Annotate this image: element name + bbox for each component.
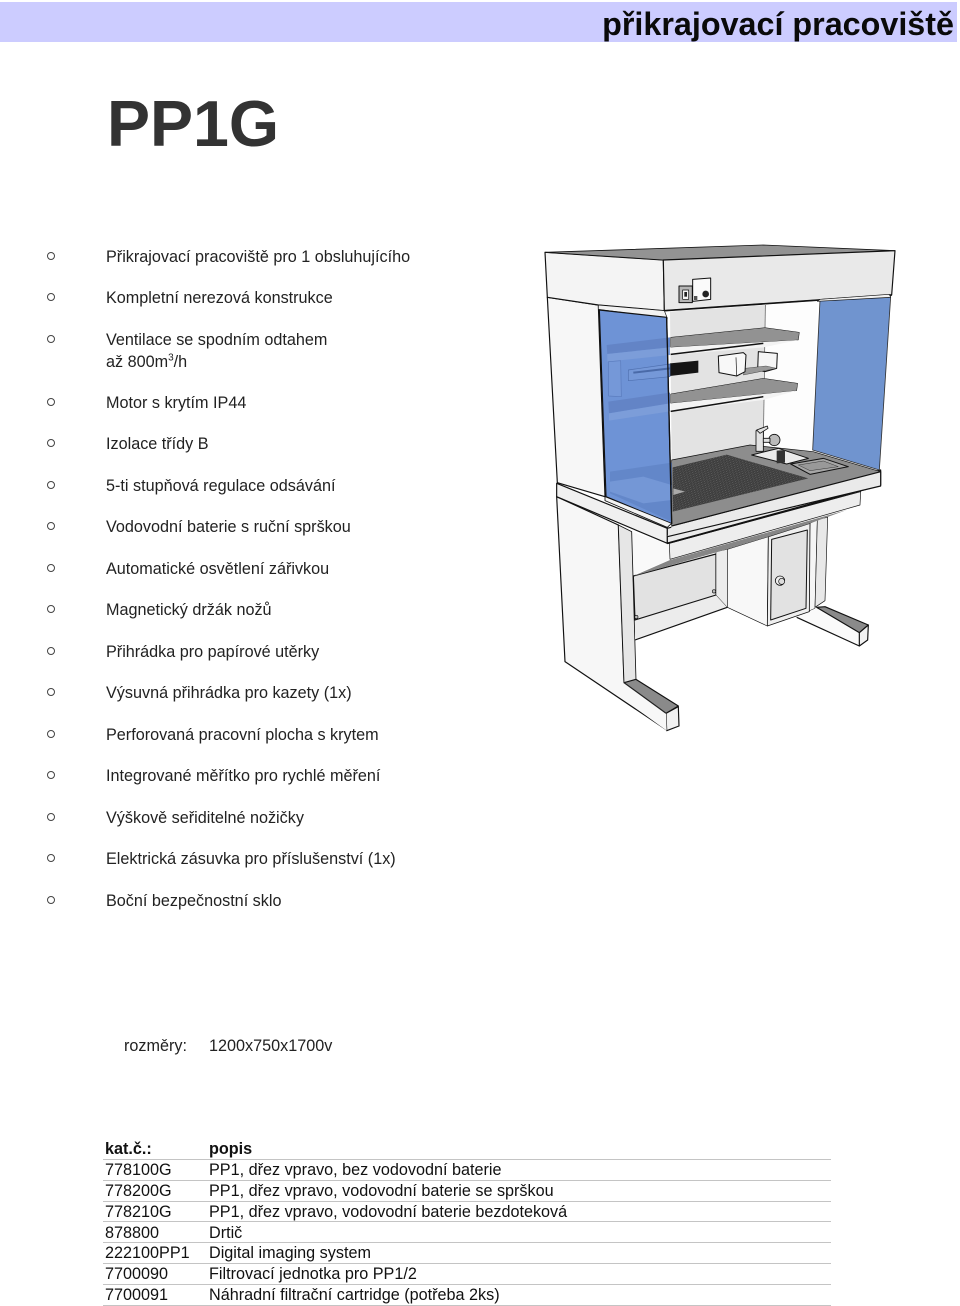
bullet bbox=[47, 813, 55, 821]
code: 878800 bbox=[105, 1224, 159, 1242]
back wall bbox=[670, 305, 766, 460]
bullet bbox=[47, 335, 55, 343]
faucet bbox=[756, 426, 780, 451]
towel box bbox=[718, 352, 777, 376]
item: až 800m3/h bbox=[106, 353, 187, 371]
item: Motor s krytím IP44 bbox=[106, 394, 246, 412]
lower frame bbox=[557, 470, 881, 731]
feature list bbox=[47, 248, 410, 910]
worktop bbox=[672, 445, 881, 526]
back panel bbox=[633, 549, 727, 640]
code: 778210G bbox=[105, 1203, 172, 1221]
item: Vodovodní baterie s ruční sprškou bbox=[106, 518, 351, 536]
item: Perforovaná pracovní plocha s krytem bbox=[106, 726, 379, 744]
item: Automatické osvětlení zářivkou bbox=[106, 560, 329, 578]
header band bbox=[0, 2, 957, 42]
header title: přikrajovací pracoviště bbox=[602, 6, 954, 42]
description: PP1, dřez vpravo, vodovodní baterie bezdoteková bbox=[209, 1203, 567, 1221]
table header: popis bbox=[209, 1140, 252, 1158]
bullet bbox=[47, 439, 55, 447]
shelves bbox=[671, 328, 799, 412]
item: Magnetický držák nožů bbox=[106, 601, 272, 619]
bullet bbox=[47, 398, 55, 406]
description: PP1, dřez vpravo, bez vodovodní baterie bbox=[209, 1161, 501, 1179]
bullet bbox=[47, 252, 55, 260]
catalogue table bbox=[103, 1140, 831, 1306]
table header: kat.č.: bbox=[105, 1140, 152, 1158]
left canopy face bbox=[545, 252, 664, 311]
item: Integrované měřítko pro rychlé měření bbox=[106, 767, 380, 785]
right glass bbox=[813, 297, 891, 470]
control switch bbox=[679, 278, 711, 303]
description: Drtič bbox=[209, 1224, 242, 1242]
code: 7700091 bbox=[105, 1286, 168, 1304]
item: 5-ti stupňová regulace odsávání bbox=[106, 477, 335, 495]
dimensions value: 1200x750x1700v bbox=[209, 1037, 332, 1055]
knife holder bbox=[670, 361, 698, 376]
canopy front bbox=[663, 251, 895, 311]
code: 222100PP1 bbox=[105, 1244, 190, 1262]
dimensions label: rozměry: bbox=[124, 1037, 187, 1055]
bullet bbox=[47, 564, 55, 572]
right leg bbox=[797, 517, 868, 646]
item: Kompletní nerezová konstrukce bbox=[106, 289, 333, 307]
code: 7700090 bbox=[105, 1265, 168, 1283]
item: Přikrajovací pracoviště pro 1 obsluhujícího bbox=[106, 248, 410, 266]
left glass bbox=[599, 310, 672, 524]
canopy top bbox=[545, 245, 895, 260]
bullet bbox=[47, 647, 55, 655]
code: 778100G bbox=[105, 1161, 172, 1179]
item: Ventilace se spodním odtahem bbox=[106, 331, 327, 349]
item: Přihrádka pro papírové utěrky bbox=[106, 643, 319, 661]
sink bbox=[752, 448, 848, 474]
bullet bbox=[47, 896, 55, 904]
item: Výškově seřiditelné nožičky bbox=[106, 809, 304, 827]
description: PP1, dřez vpravo, vodovodní baterie se sprškou bbox=[209, 1182, 554, 1200]
worktop underside bbox=[669, 492, 861, 559]
item bbox=[106, 331, 327, 371]
bullet bbox=[47, 481, 55, 489]
bullet bbox=[47, 854, 55, 862]
item: Výsuvná přihrádka pro kazety (1x) bbox=[106, 684, 352, 702]
description: Náhradní filtrační cartridge (potřeba 2ks) bbox=[209, 1286, 500, 1304]
bullet bbox=[47, 730, 55, 738]
cabinet bbox=[727, 523, 810, 626]
product code title: PP1G bbox=[107, 88, 279, 160]
item: Boční bezpečnostní sklo bbox=[106, 892, 281, 910]
description: Filtrovací jednotka pro PP1/2 bbox=[209, 1265, 417, 1283]
bullet bbox=[47, 771, 55, 779]
description: Digital imaging system bbox=[209, 1244, 371, 1262]
item: Elektrická zásuvka pro příslušenství (1x) bbox=[106, 850, 396, 868]
canopy and work area bbox=[545, 245, 895, 537]
item: Izolace třídy B bbox=[106, 435, 209, 453]
bullet bbox=[47, 522, 55, 530]
illustration: cutting workstation bbox=[544, 244, 896, 732]
bullet bbox=[47, 688, 55, 696]
bullet bbox=[47, 605, 55, 613]
bullet bbox=[47, 293, 55, 301]
code: 778200G bbox=[105, 1182, 172, 1200]
